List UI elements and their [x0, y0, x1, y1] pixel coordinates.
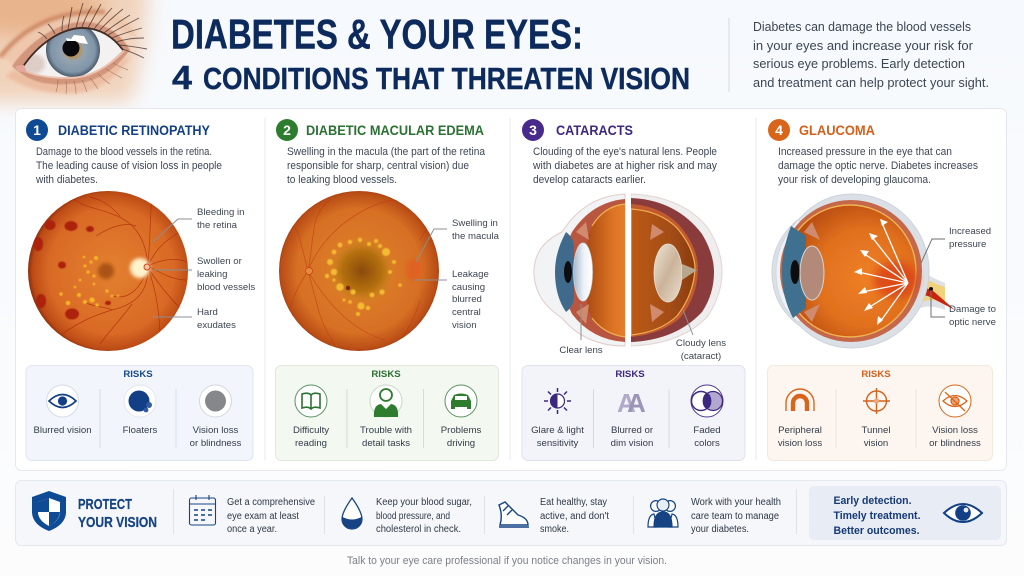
- tip: eye exam: Get a comprehensive: [227, 497, 315, 508]
- description: macular edema: responsible for sharp, central vision) due: [287, 160, 469, 172]
- callout: early detection: Timely treatment.: [834, 510, 920, 522]
- risks box 1: Vision loss: [193, 425, 239, 436]
- callout: early detection: Early detection.: [834, 495, 912, 507]
- callouts: retina labels: leaking: [197, 269, 227, 280]
- callouts: retina labels: Swollen or: [197, 256, 243, 267]
- callouts: pressure labels: Increased: [949, 226, 991, 237]
- description: retinopathy: The leading cause of vision loss in people: [36, 160, 222, 172]
- description: cataracts: develop cataracts earlier.: [533, 174, 646, 186]
- intro text: Diabetes can damage the blood vessels: [753, 20, 971, 34]
- description: glaucoma: damage the optic nerve. Diabetes increases: [778, 160, 978, 172]
- callouts: macula labels: the macula: [452, 231, 500, 242]
- risks box 4: Vision loss: [932, 425, 978, 436]
- tip: care team: your diabetes.: [691, 524, 749, 535]
- risks box 1: or blindness: [190, 438, 242, 449]
- risks box 2: Difficulty: [293, 425, 329, 436]
- icon: person: [370, 385, 402, 417]
- icon: blurred letters: [617, 388, 646, 418]
- heading: retinopathy: DIABETIC RETINOPATHY: [58, 123, 210, 138]
- icon: running shoe: [499, 502, 529, 527]
- footer note: Talk to your eye care professional if you notice changes in your vision.: [347, 555, 667, 567]
- tip: care team: [691, 497, 781, 535]
- icon: tunnel vision target: [863, 388, 890, 414]
- tip: blood sugar: Keep your blood sugar,: [376, 497, 472, 508]
- risks box 1: RISKS: [123, 369, 153, 380]
- intro text: [729, 18, 989, 92]
- risks box 2: [276, 366, 498, 460]
- callouts: macula labels: [414, 218, 500, 331]
- risks box 2: Problems: [441, 425, 481, 436]
- callouts: macula labels: blurred: [452, 294, 482, 305]
- callouts: retina labels: blood vessels: [197, 282, 255, 293]
- icon: blurred letters: A: [627, 388, 646, 418]
- risks box 3: dim vision: [611, 438, 653, 449]
- tip: blood sugar: cholesterol in check.: [376, 524, 461, 535]
- tip: eye exam: eye exam at least: [227, 511, 299, 522]
- callout: early detection: [809, 486, 1001, 540]
- icon: floaters: [124, 385, 156, 417]
- heading: cataracts: CATARACTS: [556, 123, 633, 138]
- callouts: pressure labels: pressure: [949, 239, 986, 250]
- description: cataracts: [532, 146, 718, 186]
- description: macular edema: Swelling in the macula (the part of the retina: [287, 146, 485, 158]
- description: retinopathy: with diabetes.: [35, 174, 98, 186]
- description: retinopathy: Damage to the blood vessels in the retina.: [36, 146, 212, 158]
- icon: open book: [295, 385, 327, 417]
- icon: blurred vision eye: [46, 385, 78, 417]
- tip: healthy lifestyle: Eat healthy, stay: [540, 497, 607, 508]
- heading: protect your vision: YOUR VISION: [78, 514, 157, 531]
- intro text: in your eyes and increase your risk for: [753, 39, 973, 53]
- risks box 3: colors: [694, 438, 720, 449]
- risks box 4: [768, 366, 992, 460]
- heading: macular edema: DIABETIC MACULAR EDEMA: [306, 123, 484, 138]
- callouts: retina labels: Bleeding in: [197, 207, 244, 218]
- callouts: macula labels: vision: [452, 320, 477, 331]
- intro text: serious eye problems. Early detection: [753, 57, 965, 71]
- tip: blood sugar: blood pressure, and: [376, 511, 450, 522]
- lower lashes: [56, 63, 128, 94]
- icon: faded colors: [691, 385, 723, 417]
- risks box 2: reading: [295, 438, 327, 449]
- callouts: macula labels: Leakage: [452, 269, 489, 280]
- callouts: retina labels: Hard: [197, 307, 218, 318]
- icon: vision loss grey disc: [200, 385, 232, 417]
- callouts: pressure labels: optic nerve: [949, 317, 996, 328]
- description: glaucoma: [778, 146, 978, 186]
- risks box 4: Peripheral: [778, 425, 822, 436]
- tip: healthy lifestyle: [540, 497, 609, 535]
- risks box 4: vision loss: [778, 438, 822, 449]
- number badge 3: [522, 119, 544, 141]
- panel: glaucoma: [768, 119, 996, 460]
- panel: cataracts: [522, 119, 745, 460]
- number badge 3: 3: [529, 122, 537, 138]
- number badge 1: 1: [33, 122, 41, 138]
- icon: glare sun: [544, 388, 571, 414]
- description: glaucoma: Increased pressure in the eye that can: [778, 146, 952, 158]
- callouts: macula labels: central: [452, 307, 481, 318]
- number badge 1: [26, 119, 48, 141]
- intro text: and treatment can help protect your sight.: [753, 76, 989, 90]
- description: glaucoma: your risk of developing glaucoma.: [778, 174, 931, 186]
- callouts: lens labels: Clear lens: [559, 345, 603, 356]
- icon: calendar: [190, 495, 216, 525]
- description: macular edema: [287, 146, 485, 186]
- heading: protect your vision: PROTECT: [78, 496, 132, 513]
- risks box 1: [26, 366, 253, 460]
- risks box 3: sensitivity: [537, 438, 578, 449]
- risks box 3: [522, 366, 745, 460]
- icon: blood drop: [342, 498, 362, 529]
- risks box 4: RISKS: [861, 369, 891, 380]
- icon: vision loss crossed eye: [939, 385, 971, 417]
- callouts: lens labels: [559, 338, 726, 362]
- title: 4: [172, 59, 193, 96]
- heading: glaucoma: GLAUCOMA: [799, 123, 875, 138]
- number badge 2: 2: [283, 122, 291, 138]
- panel: conditions card: [16, 108, 1006, 470]
- tip: eye exam: once a year.: [227, 524, 277, 535]
- risks box 2: RISKS: [371, 369, 401, 380]
- description: cataracts: Clouding of the eye's natural lens. People: [533, 146, 717, 158]
- retina image with hemorrhages: [28, 191, 188, 351]
- callouts: retina labels: [153, 207, 255, 331]
- tip: care team: care team to manage: [691, 511, 779, 522]
- number badge 4: 4: [775, 122, 783, 138]
- callouts: retina labels: exudates: [197, 320, 236, 331]
- icon: eye: [944, 504, 982, 522]
- tip: healthy lifestyle: smoke.: [540, 524, 569, 535]
- risks box 1: Blurred vision: [33, 425, 92, 436]
- tip: blood sugar: [376, 497, 472, 535]
- callouts: pressure labels: [949, 226, 996, 328]
- photo: close-up of eye: [0, 0, 148, 102]
- callouts: pressure labels: Damage to: [949, 304, 996, 315]
- callout: early detection: Better outcomes.: [834, 525, 920, 537]
- description: retinopathy: [35, 146, 222, 186]
- panel: protect your vision bar: [16, 480, 1006, 546]
- heading: protect your vision: [78, 496, 157, 531]
- title: DIABETES & YOUR EYES:: [171, 10, 583, 58]
- panel: diabetic retinopathy: [26, 119, 255, 460]
- icon: car: [445, 385, 477, 417]
- risks box 3: Faded: [693, 425, 721, 436]
- icon: peripheral vision loss: [786, 389, 814, 411]
- callouts: lens labels: (cataract): [681, 351, 721, 362]
- number badge 4: [768, 119, 790, 141]
- upper lashes: [38, 3, 147, 58]
- risks box 1: Floaters: [123, 425, 158, 436]
- number badge 2: [276, 119, 298, 141]
- risks box 4: vision: [864, 438, 888, 449]
- tip: healthy lifestyle: active, and don't: [540, 511, 609, 522]
- tip: care team: Work with your health: [691, 497, 781, 508]
- callouts: lens labels: Cloudy lens: [676, 338, 726, 349]
- callouts: retina labels: the retina: [197, 220, 238, 231]
- title: [171, 10, 690, 96]
- icon: blurred letters: A: [617, 388, 636, 418]
- title: CONDITIONS THAT THREATEN VISION: [203, 61, 690, 96]
- risks box 3: Blurred or: [611, 425, 654, 436]
- callouts: macula labels: Swelling in: [452, 218, 498, 229]
- retina image with macular swelling: [279, 191, 439, 351]
- tip: eye exam: [227, 497, 315, 535]
- risks box 2: detail tasks: [362, 438, 410, 449]
- risks box 3: Glare & light: [531, 425, 584, 436]
- diagram: eye with optic nerve and pressure arrows: [772, 194, 955, 348]
- risks box 3: RISKS: [615, 369, 645, 380]
- risks box 4: or blindness: [929, 438, 981, 449]
- risks box 4: Tunnel: [862, 425, 890, 436]
- diagram: eye cross-section with clear and cloudy lens: [534, 192, 722, 348]
- description: macular edema: to leaking blood vessels.: [287, 174, 397, 186]
- panel: diabetic macular edema: [276, 119, 500, 460]
- description: cataracts: with diabetes are at higher risk and may: [532, 160, 718, 172]
- icon: shield: [32, 491, 66, 531]
- risks box 2: driving: [447, 438, 475, 449]
- risks box 2: Trouble with: [360, 425, 412, 436]
- icon: care team: [648, 499, 678, 527]
- callouts: macula labels: causing: [452, 282, 485, 293]
